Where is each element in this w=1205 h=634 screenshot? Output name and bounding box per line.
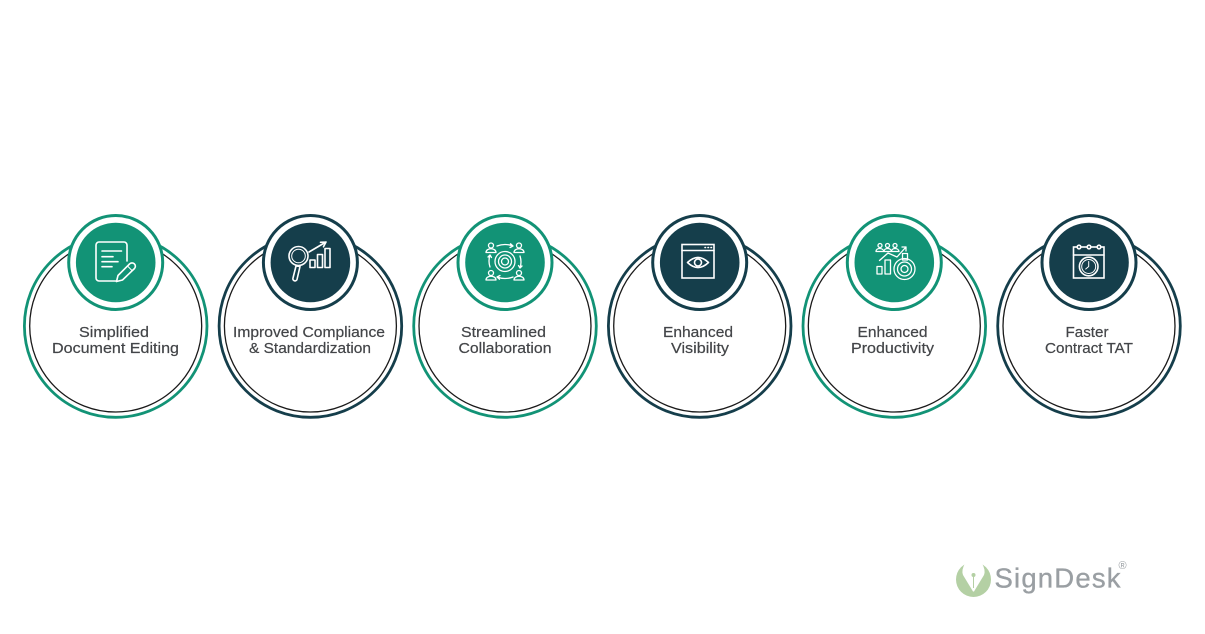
label: Improved Compliance (233, 325, 385, 341)
label: Streamlined (461, 325, 546, 341)
label: Faster (1066, 325, 1109, 341)
icon: pen nib in green circle (956, 560, 991, 597)
logo: SignDesk (956, 560, 1127, 597)
label: Simplified (79, 325, 149, 341)
label (851, 325, 935, 357)
label: Collaboration (458, 341, 552, 357)
panel: enhanced productivity (803, 216, 986, 417)
label: & Standardization (249, 341, 371, 357)
wordmark: SignDesk (994, 562, 1121, 594)
label (52, 325, 179, 357)
label (458, 325, 552, 357)
icon: browser window with eye (682, 244, 714, 278)
icon: magnifier with rising bars (289, 242, 330, 281)
panel: streamlined collaboration (414, 216, 596, 417)
registered mark: ® (1118, 560, 1127, 572)
label: Contract TAT (1045, 341, 1133, 357)
label (1045, 325, 1133, 357)
icon: calendar with clock (1074, 245, 1104, 278)
panel: faster contract TAT (998, 216, 1180, 417)
label: Productivity (851, 341, 935, 357)
icon: document with pencil (96, 242, 135, 282)
label (663, 325, 733, 357)
panel: enhanced visibility (608, 216, 791, 417)
label: Enhanced (858, 325, 928, 341)
label: Document Editing (52, 341, 179, 357)
label (233, 325, 385, 357)
icon: four people around a gear (486, 243, 524, 280)
panel: simplified document editing (24, 216, 207, 417)
label: Enhanced (663, 325, 733, 341)
panel: improved compliance and standardization (219, 216, 402, 417)
icon: team, bars, arrow and gear (876, 244, 915, 280)
label: Visibility (671, 341, 730, 357)
